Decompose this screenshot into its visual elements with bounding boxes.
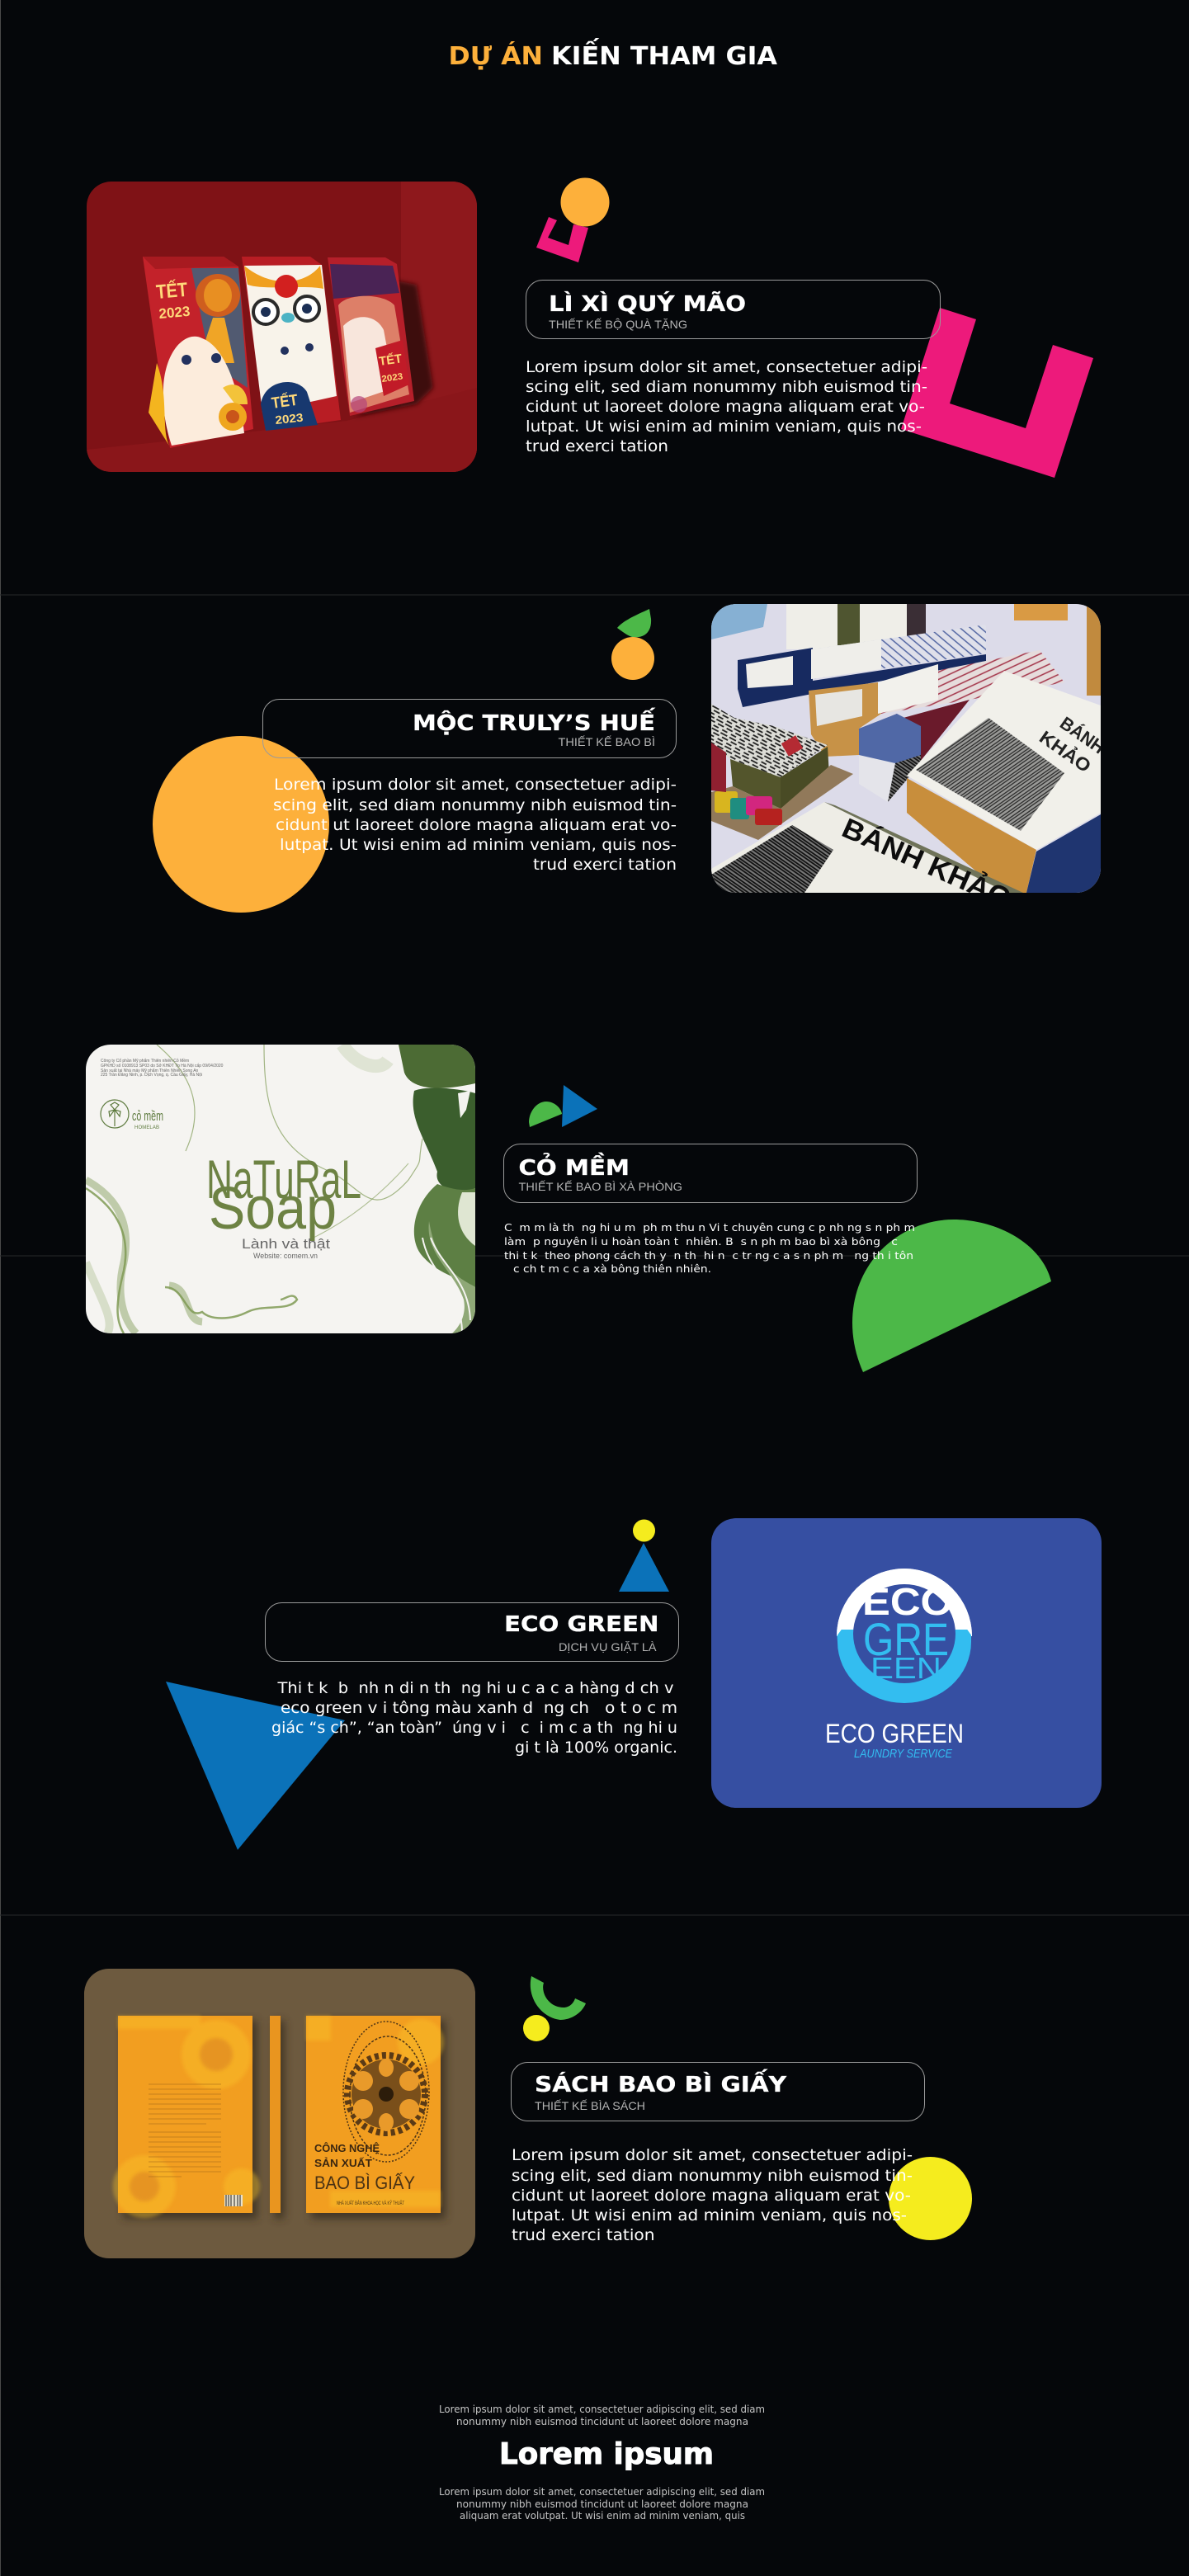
panel: mộc truly's huế xyxy=(153,604,1109,915)
label box xyxy=(503,1144,918,1203)
footer xyxy=(439,2403,765,2522)
photo: natural soap: Sản xuất tại Nhà máy Mỹ phẩm Thiên Nhiên Song An xyxy=(101,1068,199,1073)
front cover: BAO BÌ GIẤY xyxy=(314,2173,415,2193)
photo: natural soap: Lành và thật xyxy=(242,1236,330,1252)
photo: eco green logo: EEN xyxy=(871,1651,941,1685)
footer text top xyxy=(439,2403,765,2427)
photo: packaging boxes xyxy=(711,604,1109,915)
footer text top: nonummy nibh euismod tincidunt ut laoreet dolore magna xyxy=(456,2415,748,2427)
icon: big green sector xyxy=(852,1220,1051,1372)
front cover xyxy=(306,2016,444,2213)
body text xyxy=(504,1221,915,1275)
photo: natural soap xyxy=(86,1045,475,1333)
label box: CỎ MỀM xyxy=(518,1151,630,1181)
back cover xyxy=(113,2016,260,2218)
body text: giác “s ch”, “an toàn” úng v i c i m c a th ng hi u xyxy=(271,1719,677,1737)
photo: natural soap: NaTuRaL xyxy=(206,1149,361,1210)
envelope right: 2023 xyxy=(381,371,403,385)
ink boxes xyxy=(711,704,774,759)
body text xyxy=(526,358,927,455)
icon: green leaf xyxy=(617,609,651,637)
title xyxy=(449,38,778,71)
panel: sách bao bì giấy xyxy=(84,1969,972,2258)
body text: trud exerci tation xyxy=(512,2226,655,2244)
body text xyxy=(512,2146,913,2244)
label box: DỊCH VỤ GIẶT LÀ xyxy=(559,1640,657,1654)
big book xyxy=(907,671,1101,850)
footer text bottom: Lorem ipsum dolor sit amet, consectetuer adipiscing elit, sed diam xyxy=(439,2485,765,2498)
body text: scing elit, sed diam nonummy nibh euismod tin- xyxy=(526,378,927,396)
title: KIẾN THAM GIA xyxy=(551,38,778,71)
envelope left: TẾT xyxy=(155,278,189,304)
photo: eco green logo: LAUNDRY SERVICE xyxy=(854,1747,953,1761)
photo: eco green logo: ECO xyxy=(862,1580,953,1623)
footer text bottom: nonummy nibh euismod tincidunt ut laoreet dolore magna xyxy=(456,2498,748,2510)
footer text bottom xyxy=(439,2485,765,2522)
body text: lutpat. Ut wisi enim ad minim veniam, quis nos- xyxy=(512,2206,907,2225)
icon: big blue triangle xyxy=(166,1682,345,1850)
photo: natural soap: HOMELAB xyxy=(134,1125,159,1130)
icon: small yellow circle xyxy=(633,1520,655,1541)
icon: small blue triangle xyxy=(562,1085,597,1127)
body text: trud exerci tation xyxy=(526,437,668,455)
label box: THIẾT KẾ BÌA SÁCH xyxy=(535,2099,645,2112)
body text: thi t k theo phong cách th y n th hi n c tr ng c a s n ph m ng th i tôn xyxy=(504,1249,913,1262)
body text: Lorem ipsum dolor sit amet, consectetuer adipi- xyxy=(512,2146,913,2164)
photo: natural soap: Công ty Cổ phần Mỹ phẩm Thiên nhiên Cỏ Mềm xyxy=(101,1058,189,1064)
front cover: CÔNG NGHỆ xyxy=(314,2142,380,2154)
body text: cidunt ut laoreet dolore magna aliquam erat vo- xyxy=(526,398,925,416)
icon: small yellow circle xyxy=(523,2015,550,2041)
green box xyxy=(730,726,828,777)
icon: big orange circle xyxy=(153,736,329,913)
envelope middle: 2023 xyxy=(275,410,304,427)
body text: Lorem ipsum dolor sit amet, consectetuer adipi- xyxy=(274,776,677,794)
icon: small green sector xyxy=(529,1102,562,1127)
label box: SÁCH BAO BÌ GIẤY xyxy=(535,2068,787,2097)
envelope right xyxy=(328,257,414,416)
label box: THIẾT KẾ BAO BÌ XÀ PHÒNG xyxy=(518,1180,682,1193)
label box xyxy=(526,281,941,338)
mat xyxy=(711,765,853,840)
body text: scing elit, sed diam nonummy nibh euismod tin- xyxy=(273,796,677,814)
body text: cidunt ut laoreet dolore magna aliquam erat vo- xyxy=(276,816,677,834)
icon: small pink bracket xyxy=(536,217,588,262)
photo: packaging boxes: BÁNH KHẢO xyxy=(837,813,1016,915)
body text: gi t là 100% organic. xyxy=(515,1739,677,1757)
body text: lutpat. Ut wisi enim ad minim veniam, quis nos- xyxy=(526,418,922,436)
label box xyxy=(512,2063,924,2121)
envelope right: TẾT xyxy=(378,351,403,369)
photo: natural soap: GPKHD số 0108913 SP03 do Sở KHĐT Tp Hà Nội cấp 09/04/2020 xyxy=(101,1063,224,1069)
label box: THIẾT KẾ BAO BÌ xyxy=(558,735,655,748)
body text: lutpat. Ut wisi enim ad minim veniam, quis nos- xyxy=(280,836,677,854)
body text: eco green v i tông màu xanh d ng ch o t o c m xyxy=(281,1699,677,1717)
spine xyxy=(270,2016,281,2213)
envelope left: 2023 xyxy=(158,304,191,322)
label box: THIẾT KẾ BỘ QUÀ TẶNG xyxy=(549,318,687,331)
front cover: SẢN XUẤT xyxy=(314,2157,372,2169)
photo: natural soap: cỏ mềm xyxy=(132,1108,163,1124)
body text xyxy=(273,776,677,874)
icon: small orange circle xyxy=(611,637,654,680)
icon: big yellow circle xyxy=(889,2157,972,2240)
title: DỰ ÁN xyxy=(449,41,543,71)
photo: packaging boxes: BÁNH xyxy=(1056,713,1109,758)
bottom book xyxy=(711,802,1007,893)
icon: big pink bracket xyxy=(901,308,1093,478)
body text: cidunt ut laoreet dolore magna aliquam erat vo- xyxy=(512,2187,911,2205)
navy box xyxy=(738,648,986,707)
footer text top: Lorem ipsum dolor sit amet, consectetuer adipiscing elit, sed diam xyxy=(439,2403,765,2415)
footer text bottom: aliquam erat volutpat. Ut wisi enim ad minim veniam, quis xyxy=(460,2509,745,2522)
body text: làm p nguyên li u hoàn toàn t nhiên. B s n ph m bao bì xà bông c xyxy=(504,1235,898,1248)
body text: Lorem ipsum dolor sit amet, consectetuer adipi- xyxy=(526,358,927,376)
label box: LÌ XÌ QUÝ MÃO xyxy=(549,290,746,317)
footer heading: Lorem ipsum xyxy=(499,2437,714,2471)
body text xyxy=(271,1679,677,1757)
photo: packaging boxes: KHẢO xyxy=(1036,727,1095,776)
photo: book cover xyxy=(84,1969,475,2258)
panel: cỏ mềm xyxy=(86,1045,1051,1372)
envelope middle xyxy=(242,257,341,431)
body text: Thi t k b nh n di n th ng hi u c a c a hàng d ch v xyxy=(276,1679,673,1697)
body text: scing elit, sed diam nonummy nibh euismod tin- xyxy=(512,2167,913,2185)
envelope middle: TẾT xyxy=(271,391,300,413)
body text: c ch t m c c a xà bông thiên nhiên. xyxy=(513,1262,711,1275)
soap logo xyxy=(101,1100,129,1128)
hexagon xyxy=(859,714,921,763)
envelope left xyxy=(143,257,253,448)
icon: orange circle xyxy=(561,178,609,226)
photo: red envelopes xyxy=(87,182,477,472)
panel: lì xì quý mão xyxy=(87,178,1093,478)
label box xyxy=(262,700,677,757)
photo: natural soap: Website: comem.vn xyxy=(253,1252,318,1260)
photo: eco green logo xyxy=(711,1518,1102,1808)
tan box xyxy=(809,682,881,757)
icon: small blue triangle xyxy=(619,1543,669,1592)
label box xyxy=(266,1602,678,1662)
body text: trud exerci tation xyxy=(533,856,677,874)
photo: natural soap: 225 Trần Đăng Ninh, p. Dịch Vọng, q. Cầu Giấy, Hà Nội xyxy=(101,1073,202,1078)
photo: eco green logo: ECO GREEN xyxy=(825,1719,964,1748)
icon: green arc xyxy=(531,1976,586,2020)
front cover: NHÀ XUẤT BẢN KHOA HỌC VÀ KỸ THUẬT xyxy=(337,2201,404,2206)
body text: C m m là th ng hi u m ph m thu n Vi t chuyên cung c p nh ng s n ph m xyxy=(504,1221,915,1234)
label box: MỘC TRULY’S HUẾ xyxy=(413,707,655,736)
red box xyxy=(878,650,1064,714)
panel: eco green xyxy=(166,1518,1102,1850)
photo: natural soap: Soap xyxy=(209,1176,337,1242)
label box: ECO GREEN xyxy=(504,1612,658,1637)
photo: eco green logo: GRE xyxy=(863,1613,949,1665)
